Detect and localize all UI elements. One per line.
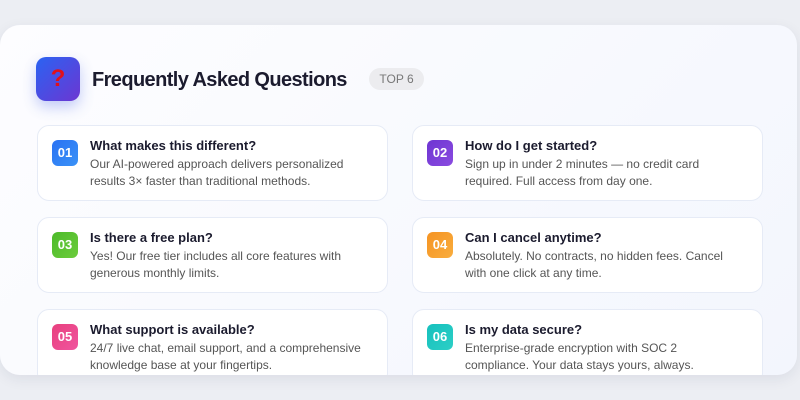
faq 03: Is there a free plan? [90,230,213,245]
title: Frequently Asked Questions [92,69,347,91]
faq 03 [37,217,388,293]
faq 01: What makes this different? [90,138,256,153]
faq 01: Our AI-powered approach delivers personalized results 3× faster than traditional methods. [90,157,343,188]
faq 06: Enterprise-grade encryption with SOC 2 compliance. Your data stays yours, always. [465,341,694,372]
faq 04 [412,217,763,293]
faq 06: Is my data secure? [465,322,582,337]
icon: question: ? [51,65,65,92]
faq 05: What support is available? [90,322,255,337]
faq 03: Yes! Our free tier includes all core features with generous monthly limits. [90,249,341,280]
faq 01 [37,125,388,201]
faq 02: 02 [433,145,447,160]
badge: top 6 [369,68,424,90]
faq 05 [37,309,388,385]
faq 06: 06 [433,329,447,344]
faq 01: 01 [58,145,72,160]
faq 04: Absolutely. No contracts, no hidden fees. Cancel with one click at any time. [465,249,723,280]
faq 05: 05 [58,329,72,344]
faq 04: Can I cancel anytime? [465,230,602,245]
faq 06 [412,309,763,385]
faq 04: 04 [433,237,447,252]
faq 03: 03 [58,237,72,252]
badge: top 6: TOP 6 [379,72,414,86]
faq 02 [412,125,763,201]
faq 05: 24/7 live chat, email support, and a comprehensive knowledge base at your fingertips. [90,341,361,372]
faq 02: Sign up in under 2 minutes — no credit card required. Full access from day one. [465,157,699,188]
faq 02: How do I get started? [465,138,597,153]
icon: question [36,57,80,101]
